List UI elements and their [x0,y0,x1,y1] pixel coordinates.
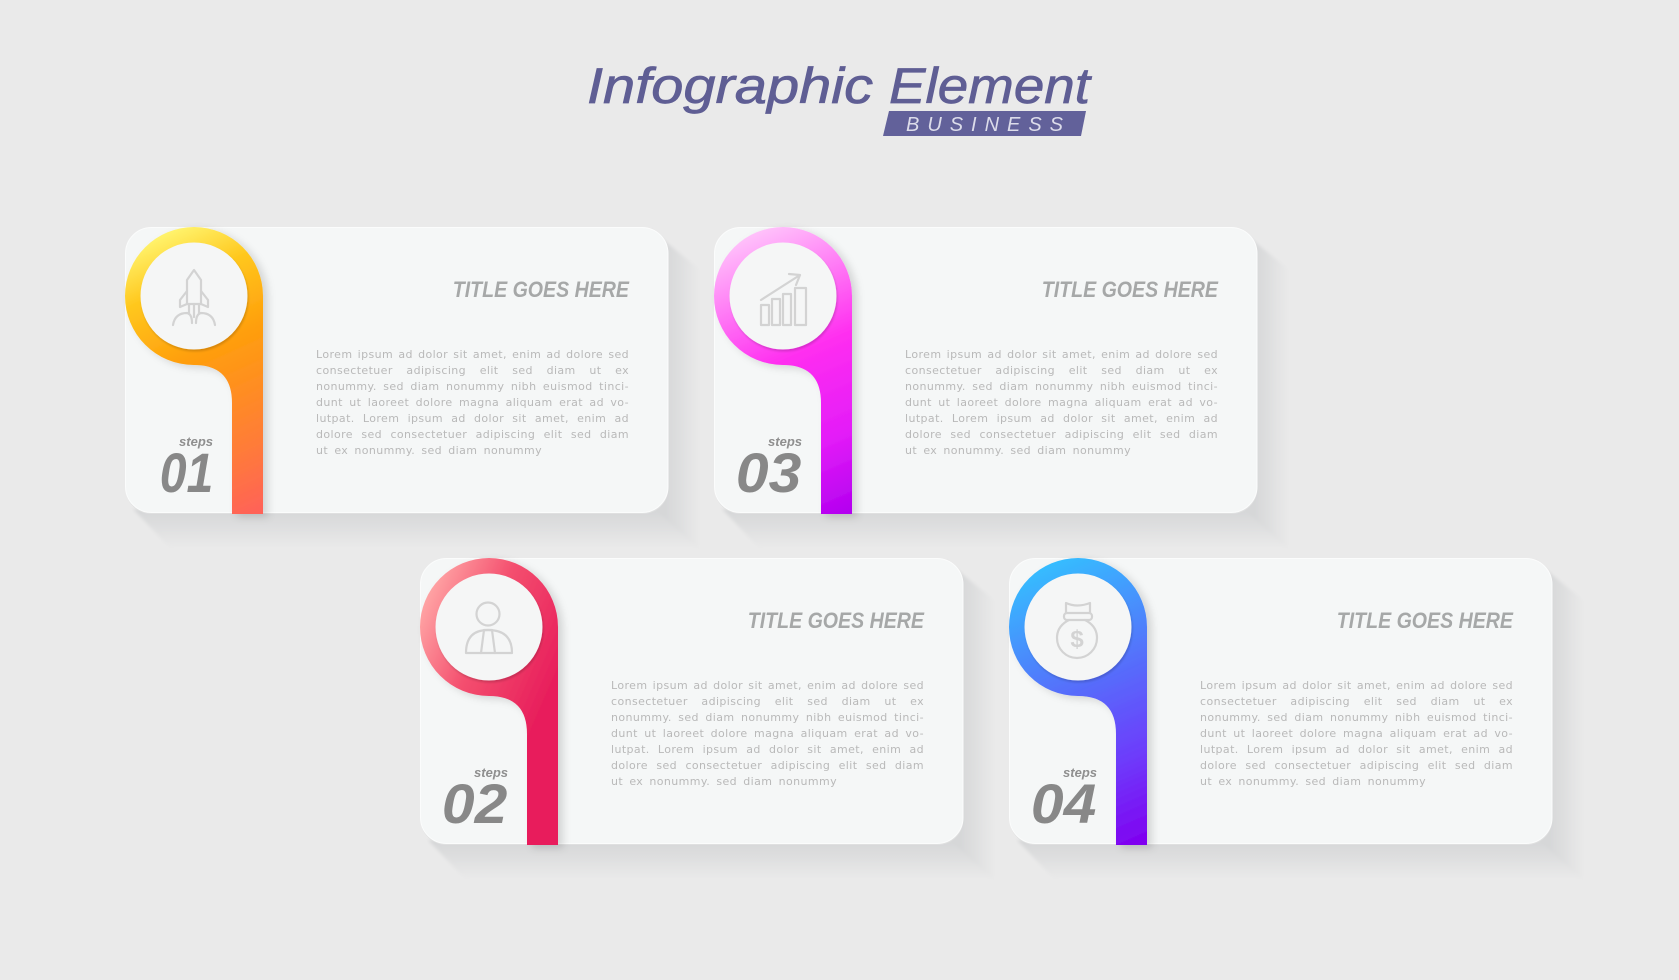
icon: money bag: $ [1070,626,1084,653]
banner: business: BUSINESS [906,114,1064,136]
card surface [420,558,964,845]
icon disc [436,574,542,680]
body text [316,348,629,457]
step label [442,765,508,835]
steps caption: steps [1063,765,1097,780]
steps caption: steps [179,434,213,449]
card title: TITLE GOES HERE [1042,277,1218,302]
body text: dolore sed consectetuer adipiscing elit sed diam [905,428,1218,441]
body text: Lorem ipsum ad dolor sit amet, enim ad dolore sed [316,348,629,361]
step label [1031,765,1097,835]
card shadow [722,229,1288,549]
gradient marker [125,227,263,514]
panel: step 04 [1009,558,1570,865]
body text: dolore sed consectetuer adipiscing elit sed diam [611,759,924,772]
body text: Lorem ipsum ad dolor sit amet, enim ad dolore sed [1200,679,1513,692]
card surface [1010,558,1552,845]
body text: lutpat. Lorem ipsum ad dolor sit amet, enim ad [611,743,924,756]
steps caption: steps [768,434,802,449]
body text: nonummy. sed diam nonummy nibh euismod tinci- [316,380,629,393]
gradient marker [714,227,852,514]
card title: TITLE GOES HERE [453,277,629,302]
icon: bar chart with arrow [761,274,806,325]
icon disc [730,242,836,350]
gradient marker [1009,558,1147,845]
body text [905,348,1218,457]
icon: businessperson [466,602,512,653]
body text: dunt ut laoreet dolore magna aliquam erat ad vo- [1200,727,1513,740]
body text [611,679,924,788]
card title: TITLE GOES HERE [1337,608,1513,633]
gradient marker [420,558,558,845]
card shadow [133,229,699,549]
step number: 02 [442,772,507,835]
panel: step 03 [714,227,1275,534]
icon: money bag [1057,603,1097,658]
body text: Lorem ipsum ad dolor sit amet, enim ad dolore sed [611,679,924,692]
body text: lutpat. Lorem ipsum ad dolor sit amet, enim ad [1200,743,1513,756]
body text: lutpat. Lorem ipsum ad dolor sit amet, enim ad [316,412,629,425]
body text: dolore sed consectetuer adipiscing elit sed diam [1200,759,1513,772]
step label [736,434,802,504]
body text: consectetuer adipiscing elit sed diam ut ex [611,695,924,708]
step number: 01 [159,441,213,504]
card surface [126,228,668,514]
body text: ut ex nonummy. sed diam nonummy [316,444,542,457]
panel: step 02 [420,558,981,865]
body text: nonummy. sed diam nonummy nibh euismod tinci- [611,711,924,724]
body text: consectetuer adipiscing elit sed diam ut ex [316,364,629,377]
body text: ut ex nonummy. sed diam nonummy [611,775,837,788]
banner: business [883,111,1086,136]
body text: ut ex nonummy. sed diam nonummy [905,444,1131,457]
icon disc [140,242,248,350]
step number: 04 [1031,772,1096,835]
step number: 03 [736,441,801,504]
body text: nonummy. sed diam nonummy nibh euismod tinci- [905,380,1218,393]
body text: consectetuer adipiscing elit sed diam ut ex [1200,695,1513,708]
body text: lutpat. Lorem ipsum ad dolor sit amet, enim ad [905,412,1218,425]
card surface [714,228,1258,514]
body text: dolore sed consectetuer adipiscing elit sed diam [316,428,629,441]
body text: dunt ut laoreet dolore magna aliquam erat ad vo- [316,396,629,409]
step label [159,434,213,504]
title: Infographic: Infographic [587,58,873,114]
card title: TITLE GOES HERE [748,608,924,633]
steps caption: steps [474,765,508,780]
body text: dunt ut laoreet dolore magna aliquam erat ad vo- [905,396,1218,409]
icon disc [1024,574,1132,680]
panel: step 01 [125,227,686,534]
card shadow [428,560,994,880]
body text: nonummy. sed diam nonummy nibh euismod tinci- [1200,711,1513,724]
body text: ut ex nonummy. sed diam nonummy [1200,775,1426,788]
icon: rocket [173,270,215,325]
title: Element: Element [889,58,1092,114]
card shadow [1017,560,1583,880]
body text: dunt ut laoreet dolore magna aliquam erat ad vo- [611,727,924,740]
body text [1200,679,1513,788]
body text: Lorem ipsum ad dolor sit amet, enim ad dolore sed [905,348,1218,361]
body text: consectetuer adipiscing elit sed diam ut ex [905,364,1218,377]
